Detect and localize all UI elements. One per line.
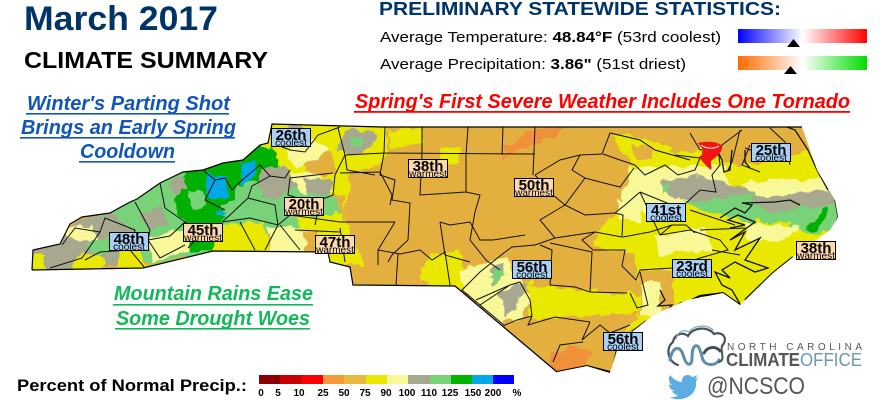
ranking label: 56th coolest coast: 56th: [608, 331, 638, 348]
icon: tornado: [698, 142, 722, 170]
sounds and estuaries: [658, 127, 838, 312]
ranking label: 41st coolest: [646, 202, 686, 224]
ranking label: 20th warmest: warmest: [284, 207, 323, 218]
ranking label: 20th warmest: [284, 196, 324, 218]
ranking label: 45th warmest: [183, 222, 222, 244]
ranking label: 45th warmest: 45th: [188, 222, 218, 239]
icon: cloud logo: [668, 326, 725, 365]
ranking label: 47th warmest: [315, 234, 354, 256]
ranking label: 26th coolest: [272, 127, 310, 149]
ranking label: 26th coolest: 26th: [276, 127, 306, 144]
legend scale labels: 0: [258, 388, 264, 399]
legend scale labels: 50: [338, 388, 350, 399]
headline: winter cooldown: Brings an Early Spring: [21, 116, 236, 139]
ranking label: 26th coolest: coolest: [275, 138, 307, 149]
ranking label: 38th warmest: warmest: [408, 169, 447, 180]
ranking label: 56th coolest inland: 56th: [517, 259, 547, 276]
ranking label: 50th warmest: [514, 177, 554, 199]
coastline: [557, 257, 793, 372]
ranking label: 56th coolest coast: [604, 331, 642, 353]
ranking label: 38th warmest coast: 38th: [801, 240, 831, 257]
ranking label: 25th coolest: coolest: [755, 153, 787, 164]
legend scale labels: 90: [380, 388, 392, 399]
ranking label: 56th coolest inland: [512, 259, 552, 281]
ranking label: 23rd coolest: 23rd: [676, 258, 708, 275]
ranking label: 56th coolest coast: coolest: [607, 342, 639, 353]
logo text: north carolina: NORTH CAROLINA: [727, 342, 862, 353]
ranking label: 50th warmest: warmest: [514, 188, 553, 199]
legend scale labels: 25: [317, 388, 329, 399]
ranking label: 48th coolest: 48th: [114, 231, 144, 248]
panel: statewide statistics: [379, 0, 867, 74]
average precipitation: Average Precipitation: 3.86" (51st driest): [380, 56, 686, 73]
legend scale labels: 125: [442, 388, 459, 399]
legend scale labels: %: [513, 388, 522, 399]
ranking label: 23rd coolest: coolest: [676, 269, 708, 280]
headline: severe weather: Spring's First Severe Weather Includes One Tornado: [355, 90, 850, 113]
headline: winter cooldown: [20, 92, 236, 163]
icon: twitter bird: [669, 375, 699, 399]
headline: winter cooldown: Cooldown: [80, 140, 175, 163]
ranking label: 38th warmest coast: [796, 240, 836, 262]
ranking label: 47th warmest: 47th: [320, 234, 350, 251]
headline: mountain rains: [113, 282, 313, 330]
logo text: climate office: CLIMATEOFFICE: [726, 350, 862, 370]
ranking label: 48th coolest: [110, 231, 148, 253]
ranking label: 50th warmest: 50th: [519, 177, 549, 194]
legend title: Percent of Normal Precip.:: [17, 376, 247, 395]
ranking label: 25th coolest: 25th: [756, 142, 786, 159]
legend scale labels: 110: [421, 388, 438, 399]
temperature gauge: [738, 29, 867, 47]
ranking label: 38th warmest: 38th: [413, 158, 443, 175]
county boundaries: [50, 127, 790, 362]
precipitation gauge: [738, 56, 867, 74]
ranking label: 41st coolest: coolest: [650, 213, 682, 224]
ranking label: 20th warmest: 20th: [289, 196, 319, 213]
legend scale labels: 150: [465, 388, 482, 399]
ranking label: 45th warmest: warmest: [183, 233, 222, 244]
title: March 2017: [24, 0, 218, 38]
ranking label: 56th coolest inland: coolest: [516, 270, 548, 281]
ranking label: 47th warmest: warmest: [315, 245, 354, 256]
twitter handle: @NCSCO: [707, 373, 805, 400]
legend colour scale: [259, 375, 514, 384]
legend scale labels: 100: [399, 388, 416, 399]
legend scale labels: 75: [359, 388, 371, 399]
legend: percent of normal precipitation: [17, 375, 522, 399]
ranking label: 48th coolest: coolest: [113, 242, 145, 253]
legend scale labels: 10: [293, 388, 305, 399]
ranking label: 41st coolest: 41st: [651, 202, 681, 219]
subtitle: CLIMATE SUMMARY: [24, 47, 268, 73]
headline: mountain rains: Mountain Rains Ease: [114, 282, 313, 305]
headline: winter cooldown: Winter's Parting Shot: [27, 92, 231, 115]
logo: NC Climate Office: [668, 326, 862, 370]
ranking label: 25th coolest: [752, 142, 790, 164]
map: percent of normal precipitation: [20, 115, 850, 385]
state outline: [32, 124, 802, 372]
ranking label: 38th warmest coast: warmest: [796, 251, 835, 262]
legend scale labels: 200: [485, 388, 502, 399]
average temperature: Average Temperature: 48.84°F (53rd coolest): [380, 29, 721, 46]
headline: mountain rains: Some Drought Woes: [116, 307, 310, 330]
legend scale labels: 5: [275, 388, 281, 399]
ranking label: 38th warmest: [408, 158, 448, 180]
ranking label: 23rd coolest: [672, 258, 712, 280]
legend scale labels: [258, 388, 522, 399]
